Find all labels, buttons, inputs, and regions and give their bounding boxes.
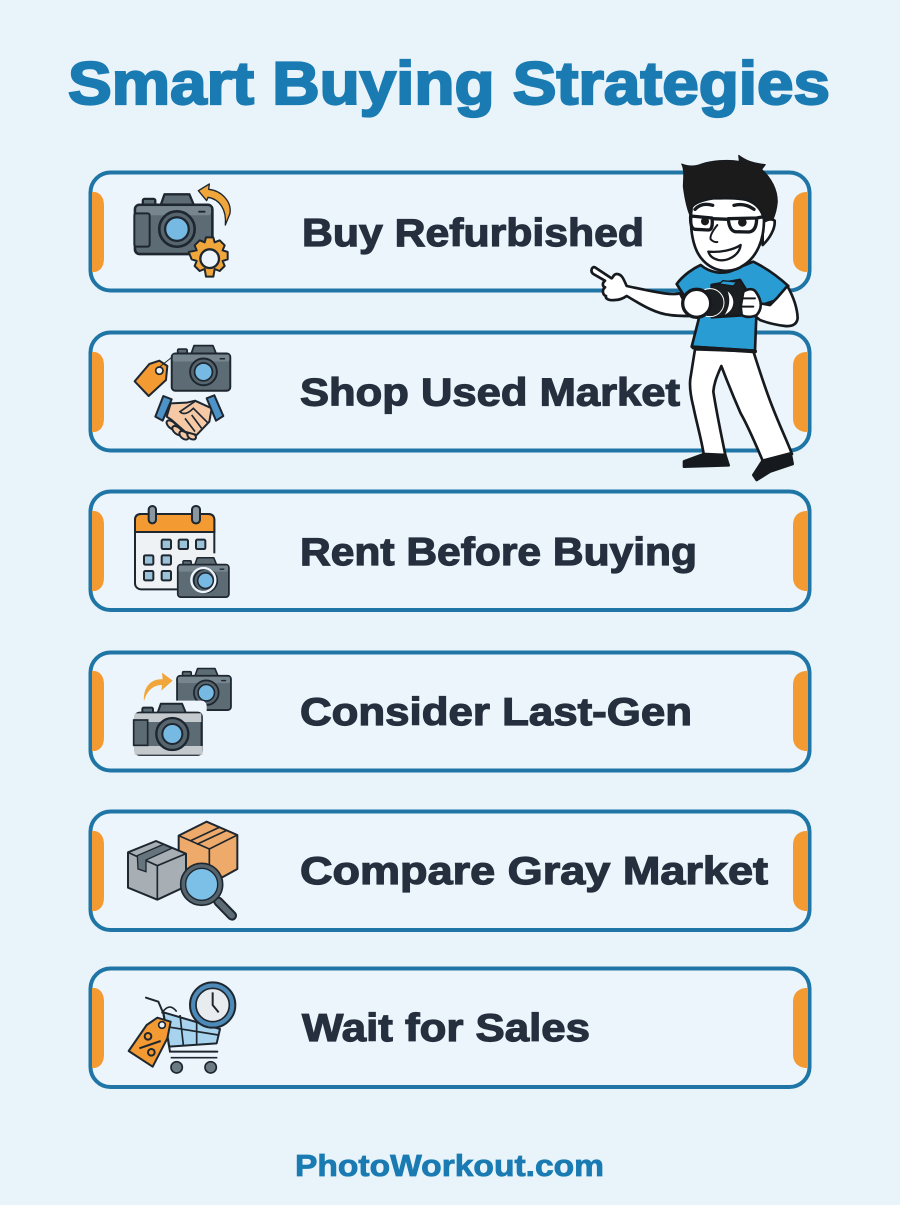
icon: gray market boxes with magnifier: [128, 822, 237, 916]
panel: shop used market: [90, 332, 810, 450]
panel: buy refurbished: [90, 172, 810, 290]
panel: wait for sales: [90, 968, 810, 1087]
label: rent before buying: Rent Before Buying: [300, 531, 697, 574]
glasses: [691, 216, 764, 232]
shirt: [677, 262, 788, 351]
panel: compare gray market: [90, 812, 810, 930]
camera: [712, 280, 748, 317]
footer: website: PhotoWorkout.com: [295, 1148, 604, 1183]
pointing arm: [592, 267, 692, 316]
mouth: [708, 245, 741, 260]
eyes: [701, 217, 709, 225]
label: wait for sales: Wait for Sales: [302, 1007, 590, 1050]
face: [691, 198, 764, 271]
right arm: [752, 286, 798, 326]
icon: refurbished camera with gear and arrow: [134, 184, 230, 277]
panel: consider last-gen: [90, 652, 810, 770]
ear: [763, 219, 775, 245]
left shoe: [684, 454, 729, 467]
camera hand: [741, 289, 761, 317]
right shoe: [753, 453, 793, 480]
label: shop used market: Shop Used Market: [300, 372, 680, 414]
icon: calendar with camera: [135, 506, 229, 597]
label: buy refurbished: Buy Refurbished: [302, 212, 644, 255]
illustration: photographer pointing: [592, 155, 798, 480]
label: consider last-gen: Consider Last-Gen: [300, 691, 692, 734]
title: Smart Buying Strategies: [68, 50, 830, 117]
icon: used camera with price tag and handshake: [135, 346, 230, 441]
icon: shopping cart with clock and sale tag: [129, 982, 235, 1073]
icon: last-gen cameras with arrow: [130, 669, 231, 758]
label: compare gray market: Compare Gray Market: [300, 850, 768, 893]
hair: [682, 155, 777, 220]
trousers: [690, 349, 792, 461]
eyebrows: [695, 204, 754, 209]
panel: rent before buying: [90, 492, 810, 610]
nose: [710, 225, 717, 242]
